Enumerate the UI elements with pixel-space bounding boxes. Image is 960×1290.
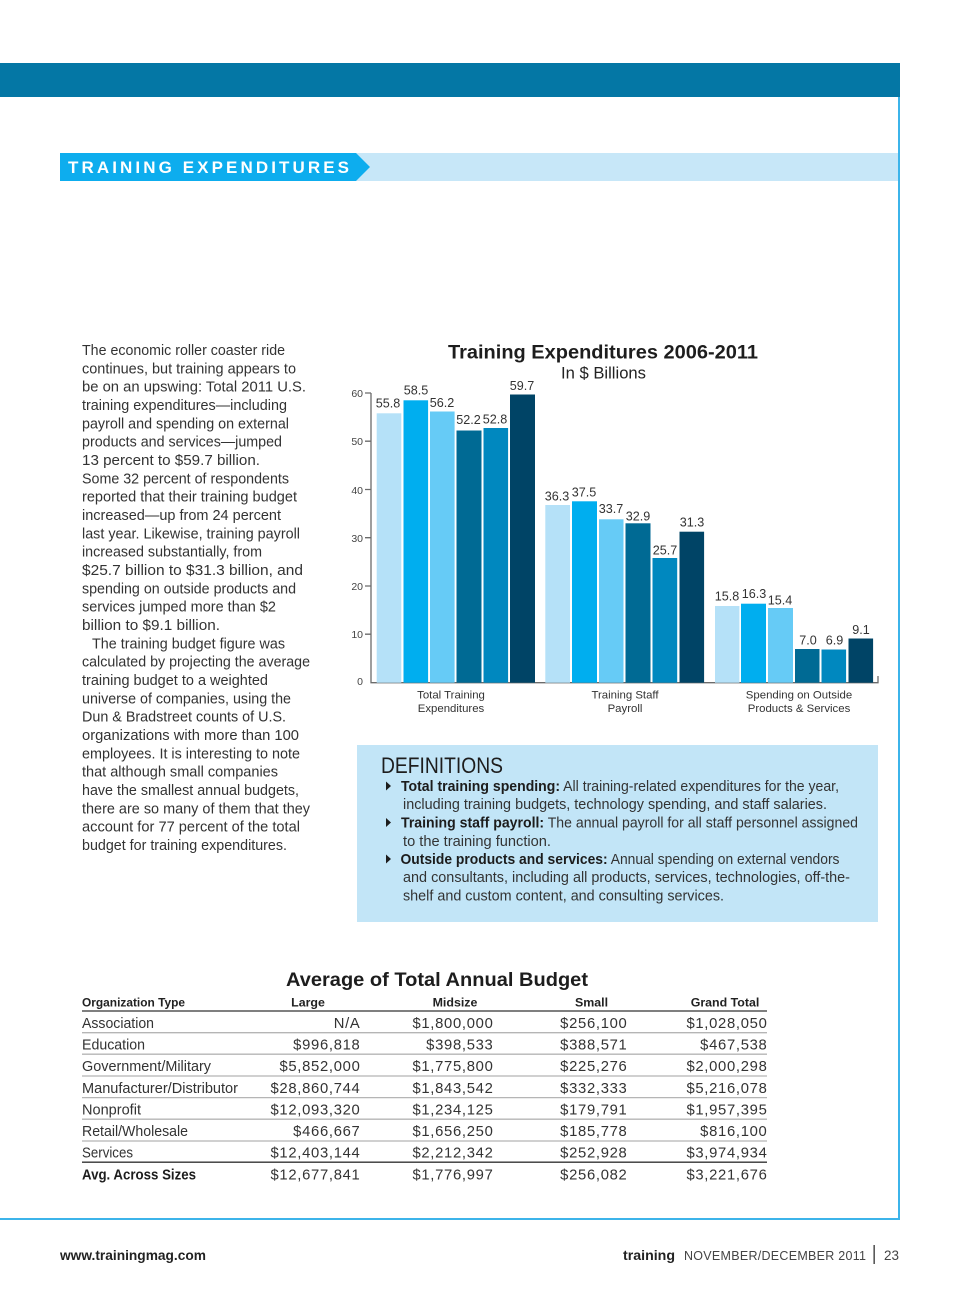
y axis: 20 [351,581,363,593]
column: small: $388,571 [560,1038,628,1054]
column: small: $256,082 [560,1168,628,1184]
body text column: products and services—jumped [82,435,282,451]
bar chart: training expenditures 2006-2011 [351,342,878,715]
column: small: $252,928 [560,1146,628,1162]
column: large: $28,860,744 [270,1081,360,1097]
table header row: Small [575,996,608,1010]
body text column: Some 32 percent of respondents [82,471,289,487]
body text column: reported that their training budget [82,490,297,506]
bar value labels: 25.7 [653,544,677,558]
body text column: Dun & Bradstreet counts of U.S. [82,710,286,726]
body text column: The economic roller coaster ride [82,343,285,359]
column: small: $179,791 [560,1102,628,1118]
column: midsize: $1,775,800 [412,1059,494,1075]
body text column: there are so many of them that they [82,801,311,817]
bar value labels: 7.0 [799,634,817,648]
category labels [417,690,852,715]
bars: spending on outside products and services [715,604,873,683]
column: midsize: $1,843,542 [412,1081,494,1097]
definition: total training spending: Total training spending: All training-related expenditures for the year, [401,779,839,795]
column: midsize: $2,212,342 [412,1146,494,1162]
table header row: Grand Total [691,996,759,1010]
column: small: $185,778 [560,1124,628,1140]
category labels: Training Staff [591,690,659,702]
body text column: increased substantially, from [82,545,262,561]
bar value labels: 9.1 [852,623,870,637]
column: small: $256,100 [560,1016,628,1032]
chart title: Training Expenditures 2006-2011 [448,342,758,364]
body text column: calculated by projecting the average [82,655,310,671]
body text column: budget for training expenditures. [82,838,287,854]
column: large: $466,667 [293,1124,360,1140]
body text column: spending on outside products and [82,581,296,597]
bar value labels: 59.7 [510,379,534,393]
row labels: Manufacturer/Distributor [82,1081,238,1097]
category labels: Total Training [417,690,485,702]
y axis: 60 [351,388,363,400]
section banner: TRAINING EXPENDITURES [68,158,349,177]
category labels: Spending on Outside [746,690,852,702]
body text column: account for 77 percent of the total [82,820,300,836]
definition: training staff payroll: to the training function. [403,834,551,850]
row labels: Government/Military [82,1059,212,1075]
table title: Average of Total Annual Budget [286,969,589,991]
category labels: Payroll [608,703,642,715]
column: small: $332,333 [560,1081,628,1097]
row labels: Retail/Wholesale [82,1124,188,1140]
bar value labels: 37.5 [572,486,596,500]
column: midsize: $1,800,000 [412,1016,494,1032]
body text column: $25.7 billion to $31.3 billion, and [82,563,303,579]
column: midsize: $1,234,125 [412,1102,494,1118]
y axis: 30 [351,533,363,545]
row labels: Services [82,1146,133,1162]
body text column: The training budget figure was [92,636,285,652]
footer publication and page number: NOVEMBER/DECEMBER 2011 [684,1249,866,1263]
bar value labels: 56.2 [430,396,454,410]
footer website: www.trainingmag.com [59,1248,206,1263]
bar value labels: 6.9 [826,634,843,648]
column: large: $12,093,320 [270,1102,360,1118]
definition: outside products and services [386,852,850,904]
body text column: increased—up from 24 percent [82,508,281,524]
column: large: N/A [334,1016,360,1032]
body text column: training budget to a weighted [82,673,268,689]
column: grand total: $2,000,298 [686,1059,768,1075]
column: grand total [686,1016,768,1184]
section banner [60,153,898,181]
table header row: Large [291,996,325,1010]
body text column [82,343,311,854]
body text column: employees. It is interesting to note [82,746,300,762]
body text column: services jumped more than $2 [82,600,276,616]
column: grand total: $3,221,676 [686,1168,768,1184]
bar value labels: 58.5 [404,384,428,398]
chart subtitle: In $ Billions [561,364,646,382]
column: grand total: $5,216,078 [686,1081,768,1097]
bar value labels: 16.3 [742,587,766,601]
bar value labels: 15.8 [715,590,739,604]
table header row: Midsize [433,996,477,1010]
column: small [560,1016,628,1184]
column: large: $12,677,841 [270,1168,360,1184]
bar value labels [376,379,870,648]
column: grand total: $1,957,395 [686,1102,768,1118]
budget table [82,969,768,1184]
column: grand total: $3,974,934 [686,1146,768,1162]
panel: definitions [357,745,878,922]
body text column: organizations with more than 100 [82,728,299,744]
y axis: 10 [351,629,363,641]
y axis: 40 [351,485,363,497]
definition: outside products and services: and consultants, including all products, services, technologies, off-the- [403,870,850,886]
y axis: 0 [357,676,363,688]
column: grand total: $467,538 [700,1038,768,1054]
body text column: payroll and spending on external [82,416,289,432]
table header row [82,996,759,1010]
bar value labels: 33.7 [599,502,623,516]
definition: total training spending [386,779,839,813]
column: large: $12,403,144 [270,1146,360,1162]
y axis: 50 [351,436,363,448]
definitions heading: DEFINITIONS [381,753,503,778]
column: grand total: $1,028,050 [686,1016,768,1032]
footer publication and page number: training [623,1247,675,1263]
bar value labels: 36.3 [545,490,569,504]
body text column: universe of companies, using the [82,691,291,707]
column: midsize: $1,776,997 [412,1168,494,1184]
footer publication and page number [623,1245,899,1264]
bar value labels: 52.8 [483,412,507,426]
body text column: that although small companies [82,765,278,781]
column: large: $5,852,000 [279,1059,360,1075]
body text column: last year. Likewise, training payroll [82,526,300,542]
row labels: Nonprofit [82,1102,141,1118]
body text column: have the smallest annual budgets, [82,783,299,799]
column: large [270,1016,360,1184]
bar value labels: 52.2 [456,413,481,427]
bars: training staff payroll [545,501,704,683]
row labels [82,1016,238,1184]
bar value labels: 32.9 [626,510,650,524]
column: midsize [412,1016,494,1184]
body text column: continues, but training appears to [82,361,296,377]
column: large: $996,818 [293,1038,360,1054]
body text column: billion to $9.1 billion. [82,618,220,634]
definition: total training spending: including training budgets, technology spending, and staff salaries. [403,797,827,813]
bar value labels: 15.4 [768,594,792,608]
row labels: Association [82,1016,154,1032]
definition: training staff payroll: Training staff payroll: The annual payroll for all staff personnel assigned [401,816,858,832]
bar value labels: 55.8 [376,396,400,410]
bar value labels: 31.3 [680,516,704,530]
body text column: be on an upswing: Total 2011 U.S. [82,380,306,396]
definition: training staff payroll [386,816,858,850]
table header row: Organization Type [82,996,185,1010]
definition: outside products and services: Outside products and services: Annual spending on external vendors [400,852,840,868]
body text column: 13 percent to $59.7 billion. [82,453,260,469]
column: midsize: $398,533 [426,1038,494,1054]
column: grand total: $816,100 [700,1124,768,1140]
top colour band [0,63,900,97]
y axis [351,388,878,688]
body text column: training expenditures—including [82,398,287,414]
row labels: Education [82,1038,145,1054]
bars: total training expenditures [377,394,535,683]
definition: outside products and services: shelf and custom content, and consulting services. [403,888,724,904]
column: small: $225,276 [560,1059,628,1075]
column: midsize: $1,656,250 [412,1124,494,1140]
row labels: Avg. Across Sizes [82,1168,196,1184]
category labels: Expenditures [418,703,485,715]
footer publication and page number: 23 [884,1248,899,1263]
category labels: Products & Services [748,703,851,715]
